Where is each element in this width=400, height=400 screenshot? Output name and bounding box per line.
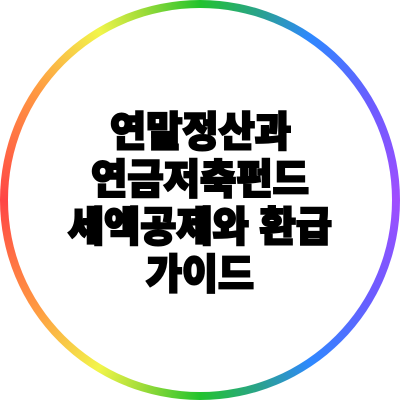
title: 세액공제와 환급	[68, 204, 332, 250]
title: 가이드	[146, 252, 254, 298]
title: 연말정산과	[110, 109, 291, 155]
title: 연금저축펀드	[91, 156, 309, 202]
